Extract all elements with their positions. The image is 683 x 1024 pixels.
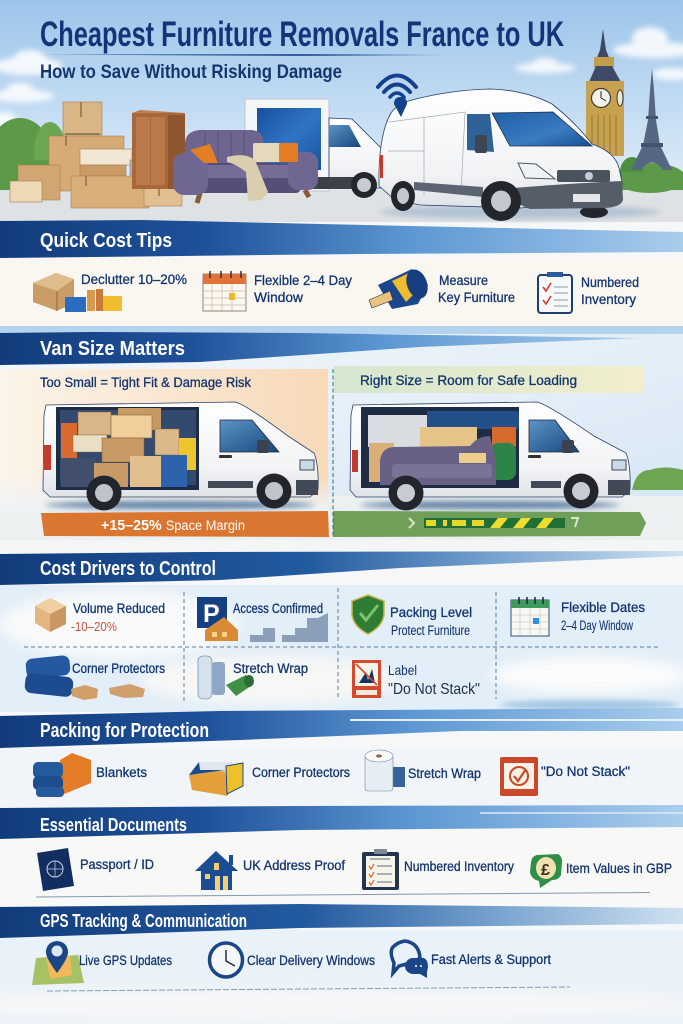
icon: parking and access <box>197 597 328 642</box>
text: access confirmed: Access Confirmed <box>233 601 323 616</box>
icon: do not stack label <box>352 660 381 698</box>
icon: passport <box>37 848 74 891</box>
icon: do not stack sign <box>500 757 538 796</box>
text: packing level <box>390 605 472 638</box>
text: corner protectors: Corner Protectors <box>252 765 350 780</box>
panel: cost drivers grid <box>24 588 660 701</box>
icon: blankets and corner protectors <box>24 655 145 700</box>
moving boxes <box>10 102 182 208</box>
text: do not stack: "Do Not Stack" <box>541 764 630 779</box>
icon: cube <box>35 598 66 632</box>
section band: GPS Tracking & Communication <box>0 904 683 938</box>
section band: Van Size Matters: Van Size Matters <box>40 338 185 360</box>
text: delivery windows: Clear Delivery Windows <box>247 953 375 968</box>
section band: Cost Drivers to Control: Cost Drivers to Control <box>40 558 216 580</box>
hero illustration <box>0 29 683 221</box>
text: stretch wrap: Stretch Wrap <box>233 661 308 676</box>
section band: Quick Cost Tips <box>0 220 683 258</box>
text: measure furniture: Measure <box>439 273 488 288</box>
panel: too small <box>0 369 329 537</box>
icon: GBP speech bubble <box>530 854 562 888</box>
text: live gps: Live GPS Updates <box>79 953 172 968</box>
text: label do not stack: "Do Not Stack" <box>388 681 480 698</box>
icon: clipboard checklist <box>538 272 572 313</box>
text: too small heading: Too Small = Tight Fit & Damage Risk <box>40 375 251 390</box>
icon: stretch wrap rolls <box>198 656 254 699</box>
text: flexible window: Window <box>254 290 303 305</box>
text: measure furniture <box>438 273 515 305</box>
subtitle: How to Save Without Risking Damage <box>40 62 342 83</box>
text: label do not stack: Label <box>388 662 417 678</box>
text: flexible dates: Flexible Dates <box>561 600 645 615</box>
icon: clipboard <box>362 849 399 890</box>
clouds <box>0 27 683 132</box>
text: passport: Passport / ID <box>80 857 154 872</box>
text: label do not stack <box>388 662 480 698</box>
text: numbered inventory: Inventory <box>581 292 636 307</box>
text: item values: Item Values in GBP <box>566 861 672 876</box>
text: numbered inventory <box>581 275 639 307</box>
text: declutter: Declutter 10–20% <box>81 272 187 287</box>
icon: clock <box>210 943 242 977</box>
section band: GPS Tracking & Communication: GPS Tracking & Communication <box>40 911 247 931</box>
text: measure furniture: Key Furniture <box>438 290 515 305</box>
icon: wifi location pin <box>378 76 416 117</box>
section band: Essential Documents: Essential Documents <box>40 815 187 835</box>
wardrobe <box>132 110 185 189</box>
text: volume reduced: -10–20% <box>71 620 117 634</box>
icon: stretch wrap roll <box>365 750 405 791</box>
grid dashes <box>24 588 660 701</box>
icon: shield <box>352 595 384 634</box>
panel: right size <box>333 366 683 537</box>
van with room to spare <box>350 402 630 510</box>
text: stretch wrap: Stretch Wrap <box>408 766 481 781</box>
text: numbered inventory: Numbered Inventory <box>404 859 514 874</box>
ground shadow <box>380 205 660 219</box>
text: packing level: Packing Level <box>390 605 472 620</box>
trees <box>0 118 683 193</box>
panel: quick cost tips <box>33 266 639 313</box>
icon: house <box>195 851 238 890</box>
section band: Van Size Matters <box>0 332 640 365</box>
icon: box and packing items <box>33 273 122 312</box>
text: numbered inventory: Numbered <box>581 275 639 290</box>
icon: Big Ben <box>586 29 624 156</box>
text: flexible window: Flexible 2–4 Day <box>254 273 352 288</box>
icon: flexible dates calendar <box>511 597 549 636</box>
icon: corner protectors <box>189 762 243 796</box>
section band: Essential Documents <box>0 805 683 839</box>
text: right size heading: Right Size = Room for Safe Loading <box>360 373 577 388</box>
text: fast alerts: Fast Alerts & Support <box>431 952 551 967</box>
distant bush <box>632 468 683 490</box>
section band: Quick Cost Tips: Quick Cost Tips <box>40 230 172 252</box>
icon: blankets <box>33 753 91 797</box>
panel: GPS tracking <box>32 941 570 991</box>
section band: Packing for Protection: Packing for Protection <box>40 720 209 742</box>
text: corner protectors: Corner Protectors <box>72 661 165 676</box>
text: volume reduced <box>71 601 165 634</box>
orange callout bar <box>41 511 329 537</box>
panel: essential documents <box>36 848 672 897</box>
section band: Cost Drivers to Control <box>0 551 683 585</box>
icon: tape measure <box>369 266 432 309</box>
text: flexible dates <box>561 600 645 633</box>
sofa <box>173 130 318 203</box>
main white van <box>379 89 623 221</box>
green callout bar <box>333 511 646 537</box>
text: packing level: Protect Furniture <box>391 623 470 638</box>
orange callout bar: +15–25% Space Margin <box>101 517 245 534</box>
truck <box>245 99 381 198</box>
title underline <box>40 54 442 56</box>
section band: Packing for Protection <box>0 708 683 748</box>
icon: GBP speech bubble: £ <box>541 862 550 879</box>
text: flexible window <box>254 273 352 305</box>
van with crammed cargo <box>43 402 318 510</box>
icon: parking and access: P <box>203 600 220 628</box>
text: address proof: UK Address Proof <box>243 858 345 873</box>
text: flexible dates: 2–4 Day Window <box>561 618 633 633</box>
text: blankets: Blankets <box>96 765 147 780</box>
dashed divider <box>47 987 570 991</box>
icon: chat bubbles <box>391 941 428 978</box>
panel: packing for protection <box>33 750 630 797</box>
icon: Eiffel Tower <box>631 68 672 170</box>
divider line <box>36 892 650 897</box>
divider between van panels <box>332 369 334 537</box>
text: right size heading <box>334 366 644 393</box>
icon: map with pin <box>32 941 84 985</box>
icon: calendar <box>203 271 246 311</box>
text: volume reduced: Volume Reduced <box>73 601 165 616</box>
